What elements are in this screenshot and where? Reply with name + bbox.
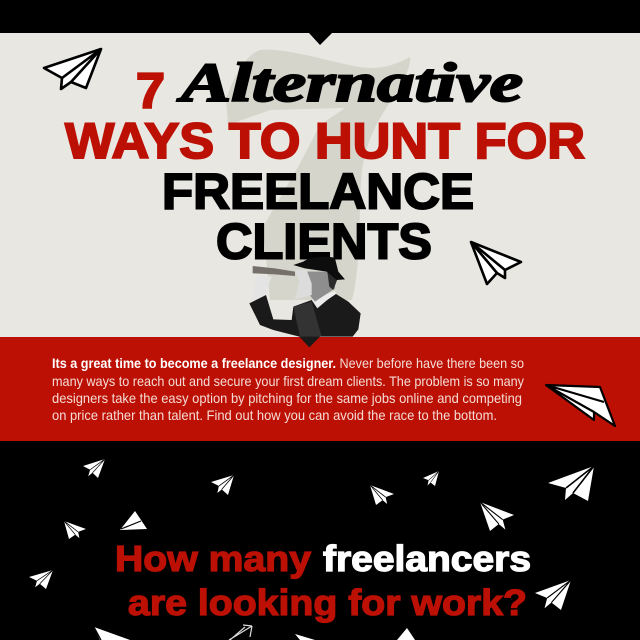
panel: paper title area xyxy=(0,33,640,337)
hat xyxy=(293,257,345,280)
illustration: man with telescope xyxy=(249,257,361,347)
title: freelance: FREELANCE xyxy=(162,164,474,220)
plane 11 xyxy=(548,466,594,501)
intro text: Its a great time to become a freelance designer. Never before have there been so xyxy=(52,355,524,371)
plane 8 xyxy=(295,634,315,640)
plane 3 xyxy=(120,511,147,530)
icon: paper plane top left xyxy=(44,49,101,89)
title: ways to hunt for: WAYS TO HUNT FOR xyxy=(65,113,585,169)
intro text xyxy=(52,355,524,423)
intro text: designers take the easy option by pitching for the same jobs online and competing xyxy=(52,390,522,406)
plane 1 xyxy=(81,457,105,478)
face xyxy=(307,272,335,302)
plane 13 xyxy=(532,578,571,610)
title: clients: CLIENTS xyxy=(216,214,432,270)
section heading xyxy=(115,538,531,623)
icon: paper plane right of title xyxy=(471,242,521,284)
title xyxy=(65,52,585,270)
plane 14 xyxy=(397,628,415,640)
flock of paper planes xyxy=(27,457,594,640)
intro text: on price rather than talent. Find out how you can avoid the race to the bottom. xyxy=(52,407,497,423)
plane 2 xyxy=(209,472,234,495)
intro text: many ways to reach out and secure your first dream clients. The problem is so many xyxy=(52,373,524,389)
plane 5 xyxy=(27,568,53,589)
hair xyxy=(327,272,338,290)
shirt collar xyxy=(313,291,336,307)
plane 4 xyxy=(64,520,87,539)
heading: are looking for work: are looking for work? xyxy=(128,582,527,623)
notch pointer xyxy=(309,33,332,45)
ghost number seven xyxy=(226,50,410,300)
plane 7 xyxy=(229,625,252,640)
heading: how many: How many xyxy=(115,538,311,579)
title: Alternative: Alternative xyxy=(177,52,523,113)
telescope xyxy=(253,266,295,276)
plane 9 xyxy=(370,484,396,505)
title: number 7: 7 xyxy=(136,63,165,119)
plane 10 xyxy=(422,471,439,486)
plane 12 xyxy=(480,501,517,531)
icon: paper plane in red band xyxy=(546,385,615,426)
top black band xyxy=(0,0,640,33)
heading: freelancers: freelancers xyxy=(323,538,531,579)
far hand and cuff xyxy=(251,275,272,301)
panel: black section xyxy=(0,441,640,640)
coat xyxy=(249,293,361,347)
plane 6 xyxy=(94,627,130,640)
coat highlight xyxy=(293,302,322,337)
panel: red intro band xyxy=(0,337,640,441)
near hand and cuff xyxy=(295,270,312,299)
